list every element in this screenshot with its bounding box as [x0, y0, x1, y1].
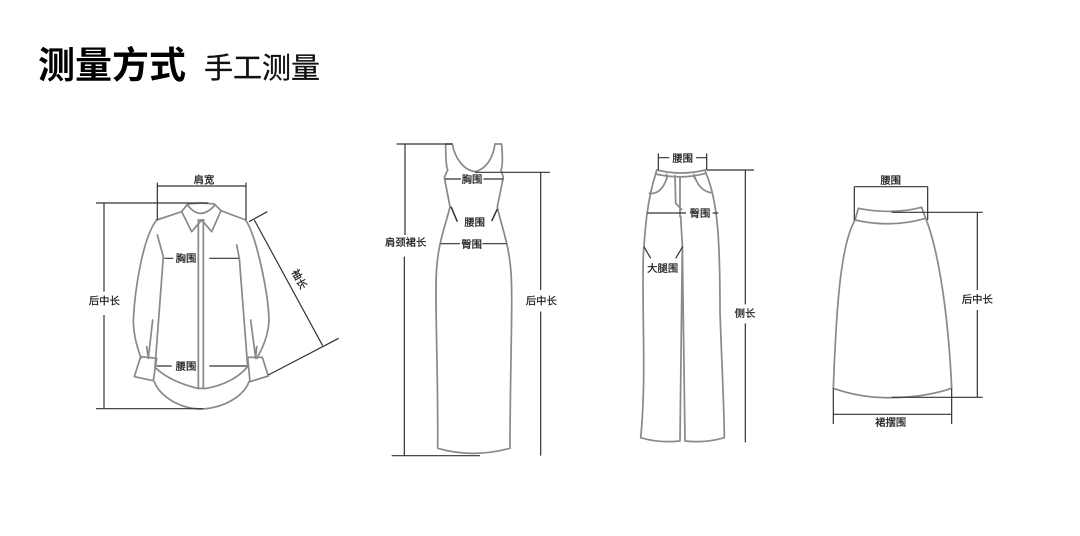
panel: dress diagram: [385, 144, 557, 456]
panel: skirt diagram: [833, 175, 993, 429]
label: waist: 腰围: [880, 175, 901, 187]
skirt outline: [833, 207, 952, 398]
label: waist: 腰围: [176, 361, 196, 373]
label: side length: 侧长: [735, 307, 755, 320]
label: chest: 胸围: [462, 173, 482, 186]
shirt measurement lines: [96, 183, 339, 409]
label: sleeve length: 袖长: [289, 267, 310, 291]
panel: shirt diagram: [89, 173, 339, 409]
skirt measurement lines: [833, 187, 983, 424]
label: hem: 裙摆围: [875, 416, 906, 429]
dress measurement lines: [392, 144, 550, 456]
label: waist: 腰围: [464, 217, 485, 229]
title: 手工测量: [204, 52, 320, 85]
title: [38, 45, 320, 86]
label: back length: 后中长: [962, 293, 993, 306]
label: thigh: 大腿围: [647, 262, 678, 275]
label: shoulder width: 肩宽: [194, 173, 214, 186]
label: waist: 腰围: [672, 153, 693, 165]
trousers outline: [641, 170, 724, 442]
label: shoulder-neck length: 肩颈裙长: [385, 236, 426, 249]
label: hip: 臀围: [690, 208, 710, 220]
dress outline: [436, 144, 512, 453]
title: 测量方式: [38, 45, 186, 86]
label: hip: 臀围: [461, 239, 482, 251]
label: back length: 后中长: [89, 294, 120, 307]
panel: trousers diagram: [641, 153, 755, 442]
label: chest: 胸围: [176, 252, 196, 265]
label: back length: 后中长: [526, 294, 557, 307]
trousers measurement lines: [644, 153, 754, 442]
shirt outline: [133, 203, 269, 409]
